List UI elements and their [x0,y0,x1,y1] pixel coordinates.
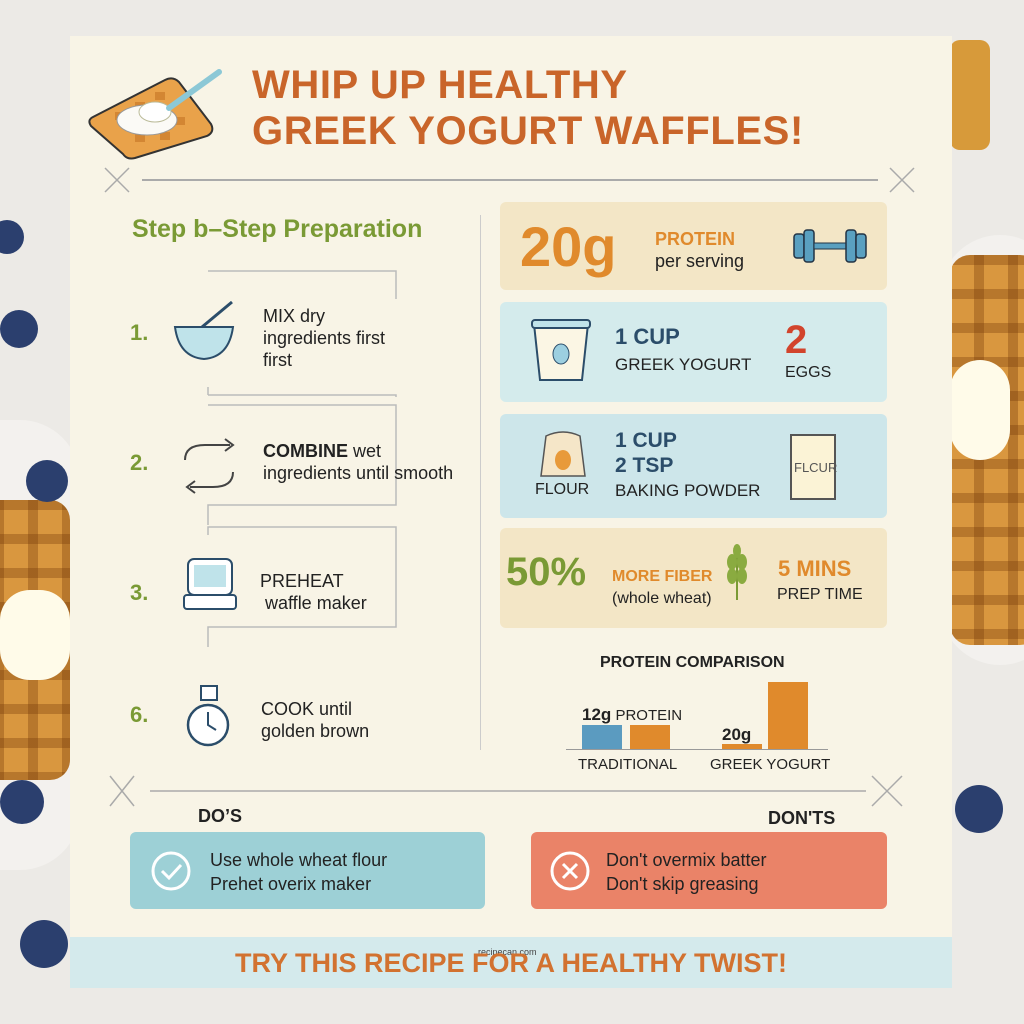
heading: donts: DON'TS [768,808,835,828]
footer banner: TRY THIS RECIPE FOR A HEALTHY TWIST! [235,948,787,978]
step 1 [130,300,385,370]
panel: yogurt eggs: EGGS [785,364,831,381]
panel: fiber prep: PREP TIME [777,586,863,603]
panel: fiber prep: 50% [506,550,586,594]
panel: yogurt eggs: 1 CUP [615,324,680,349]
panel: donts [531,832,887,909]
step 4: COOK until [261,699,352,719]
panel: fiber prep [500,528,887,628]
panel: flour: FLCUR [794,460,837,475]
panel: fiber prep: MORE FIBER [612,568,712,585]
footer banner [70,937,952,988]
step 3 [130,558,367,613]
divider top [104,168,914,192]
panel: yogurt eggs: GREEK YOGURT [615,355,751,374]
step 4 [130,685,369,746]
step 3: 3. [130,580,148,605]
panel: dos: Use whole wheat flour [210,850,387,870]
step 3: waffle maker [265,593,367,613]
panel: fiber prep: (whole wheat) [612,590,712,607]
divider bottom [110,776,902,806]
panel: flour: 2 TSP [615,454,673,477]
panel: protein: 20g [520,215,616,278]
panel: protein [500,202,887,290]
panel: donts: Don't skip greasing [606,874,759,894]
step 4: 6. [130,702,148,727]
chart: protein comparison: 20g [722,725,751,744]
step 3: PREHEAT [260,571,344,591]
title [252,63,804,153]
panel: protein: PROTEIN [655,229,735,249]
panel: flour: BAKING POWDER [615,481,760,500]
title: WHIP UP HEALTHY [252,63,628,107]
panel: protein: per serving [655,251,744,271]
vertical divider [480,215,481,750]
heading: steps: Step b–Step Preparation [132,215,422,243]
chart: protein comparison: GREEK YOGURT [710,756,830,773]
chart: protein comparison: 12g PROTEIN [582,705,682,724]
step 1: ingredients first [263,328,385,348]
panel: yogurt eggs [500,302,887,402]
step 4: golden brown [261,721,369,741]
step 2: ingredients until smooth [263,463,453,483]
panel: donts: Don't overmix batter [606,850,766,870]
icon: dumbbell [793,229,867,263]
panel: yogurt eggs: 2 [785,318,807,362]
chart: protein comparison: TRADITIONAL [578,756,677,773]
step 1: MIX dry [263,306,325,326]
panel: flour: FLOUR [535,481,589,498]
panel: dos [130,832,485,909]
icon: waffle with yogurt [88,69,222,160]
panel: flour [500,414,887,518]
step 1: 1. [130,320,148,345]
panel: fiber prep: 5 MINS [778,556,851,581]
step 1: first [263,350,292,370]
step 2 [130,438,453,494]
footer banner: recipecan.com [478,947,537,957]
title: GREEK YOGURT WAFFLES! [252,109,804,153]
panel: flour: 1 CUP [615,429,677,452]
heading: dos: DO’S [198,806,242,826]
chart: protein comparison: PROTEIN COMPARISON [600,654,785,671]
steps connectors [207,270,397,647]
panel: dos: Prehet overix maker [210,874,371,894]
step 2: 2. [130,450,148,475]
step 2: COMBINE wet [263,441,381,461]
chart: protein comparison [566,654,830,773]
